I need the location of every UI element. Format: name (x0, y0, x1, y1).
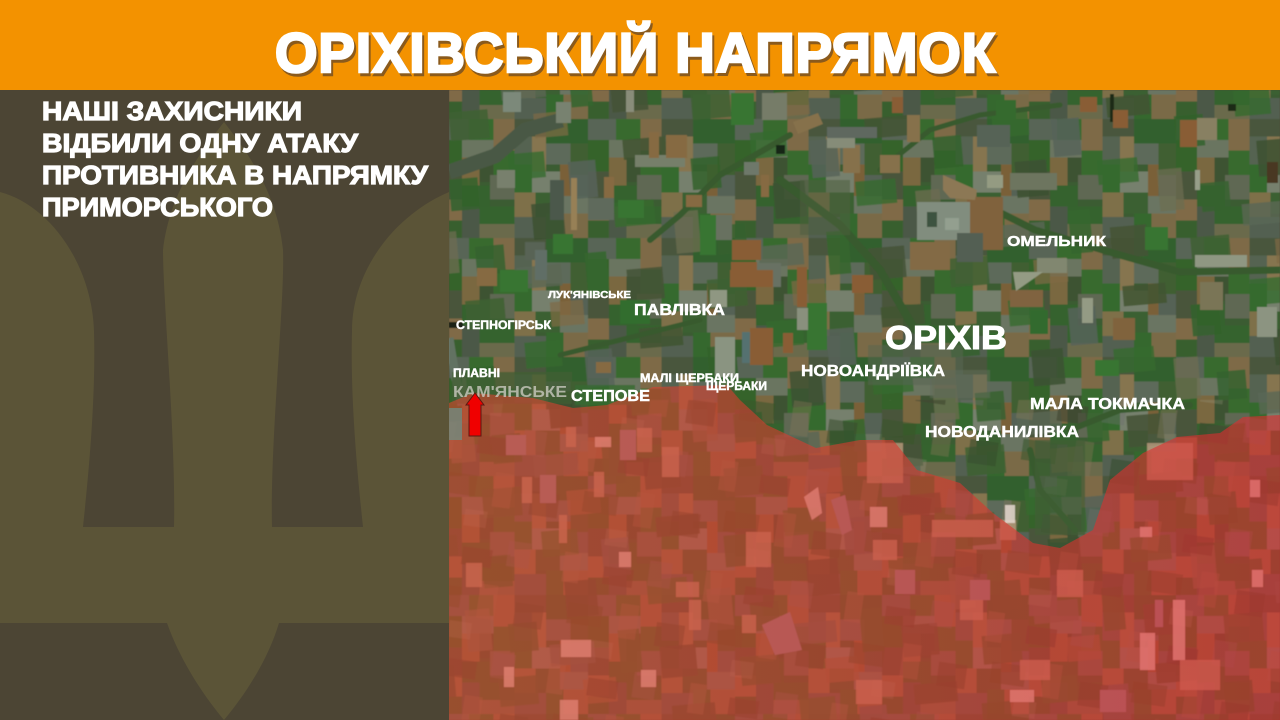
header bar: orange banner with title (0, 0, 1280, 90)
label: Омельник: ОМЕЛЬНИК (1007, 233, 1107, 250)
label: Мала Токмачка: МАЛА ТОКМАЧКА (1030, 396, 1185, 413)
label: Павлівка: ПАВЛІВКА (634, 302, 725, 319)
text block: situation summary: ПРИМОРСЬКОГО (42, 192, 273, 222)
place labels on the map (453, 233, 1185, 441)
green-dark tint over the field patchwork (449, 90, 1280, 720)
label: Кам'янське: КАМ'ЯНСЬКЕ (453, 384, 567, 401)
icon: trident emblem (0, 122, 449, 720)
label: Степове: СТЕПОВЕ (571, 388, 650, 405)
label: Щербаки: ЩЕРБАКИ (706, 381, 767, 393)
label: Степногірськ: СТЕПНОГІРСЬК (456, 320, 552, 332)
label: Новоандріївка: НОВОАНДРІЇВКА (801, 363, 945, 380)
label: Плавні: ПЛАВНІ (453, 368, 500, 380)
text block: situation summary: ПРОТИВНИКА В НАПРЯМКУ (42, 160, 429, 190)
title shadow: ОРІХІВСЬКИЙ НАПРЯМОК (277, 24, 998, 87)
text block: situation summary: НАШІ ЗАХИСНИКИ (42, 96, 302, 126)
label: Лук'янівське: ЛУК'ЯНІВСЬКЕ (548, 289, 631, 301)
left panel: olive background with trident (0, 90, 449, 720)
text block: situation summary: ВІДБИЛИ ОДНУ АТАКУ (42, 128, 359, 158)
text block: situation summary (42, 96, 429, 222)
label: Оріхів: ОРІХІВ (885, 319, 1007, 356)
arrow: red attack direction (466, 393, 484, 436)
label: Новоданилівка: НОВОДАНИЛІВКА (925, 424, 1079, 441)
label: Малі Щербаки: МАЛІ ЩЕРБАКИ (640, 373, 739, 385)
panel: satellite map (449, 90, 1280, 720)
title: ОРІХІВСЬКИЙ НАПРЯМОК (275, 21, 996, 84)
occupied territory: red overlay (449, 385, 1280, 720)
